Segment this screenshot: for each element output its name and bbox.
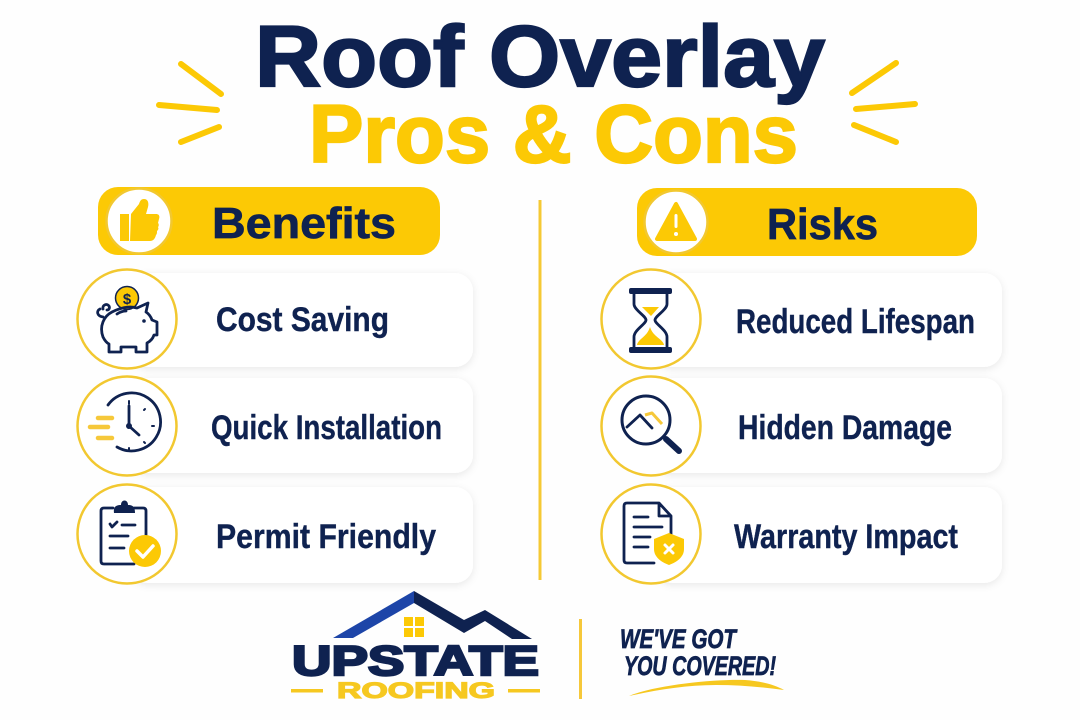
tagline: WE'VE GOT <box>620 624 738 654</box>
sub wordmark: ROOFING <box>337 678 495 703</box>
risks header <box>637 188 977 256</box>
wordmark: UPSTATE <box>292 637 539 684</box>
decorative rays right <box>852 63 915 142</box>
card: quick installation <box>78 376 473 476</box>
card: permit friendly <box>78 484 473 584</box>
card: reduced lifespan <box>602 270 1002 368</box>
label: cost saving: Cost Saving <box>216 301 389 339</box>
icon: piggy bank: $ <box>123 291 132 308</box>
icon: thumbs up <box>120 199 159 241</box>
title: Roof Overlay <box>255 9 825 105</box>
title <box>255 9 825 180</box>
footer divider <box>579 619 582 699</box>
icon: magnifier <box>622 396 679 451</box>
card: hidden damage <box>602 376 1002 476</box>
center divider <box>538 200 542 580</box>
tagline <box>620 624 784 696</box>
decorative rays left <box>159 64 221 142</box>
panel: benefits <box>78 187 473 584</box>
label: quick installation: Quick Installation <box>211 409 442 447</box>
benefits header <box>98 187 440 255</box>
title: Pros & Cons <box>309 89 798 180</box>
icon: piggy bank <box>98 286 157 352</box>
card: warranty impact <box>602 484 1002 584</box>
benefits title: Benefits <box>212 199 396 248</box>
panel: risks <box>602 188 1002 584</box>
card: cost saving <box>78 270 473 368</box>
label: reduced lifespan: Reduced Lifespan <box>736 303 975 341</box>
tagline: YOU COVERED! <box>624 651 776 681</box>
roof mark <box>333 591 532 639</box>
label: permit friendly: Permit Friendly <box>216 518 436 556</box>
swoosh <box>629 680 784 696</box>
icon: document with shield <box>624 503 684 565</box>
label: hidden damage: Hidden Damage <box>738 409 952 447</box>
logo: upstate roofing <box>291 591 540 703</box>
icon: warning triangle <box>657 204 695 239</box>
risks title: Risks <box>767 200 878 249</box>
icon: clock <box>90 393 161 451</box>
icon: clipboard <box>101 500 161 567</box>
label: warranty impact: Warranty Impact <box>734 518 958 556</box>
icon: hourglass <box>629 288 672 353</box>
